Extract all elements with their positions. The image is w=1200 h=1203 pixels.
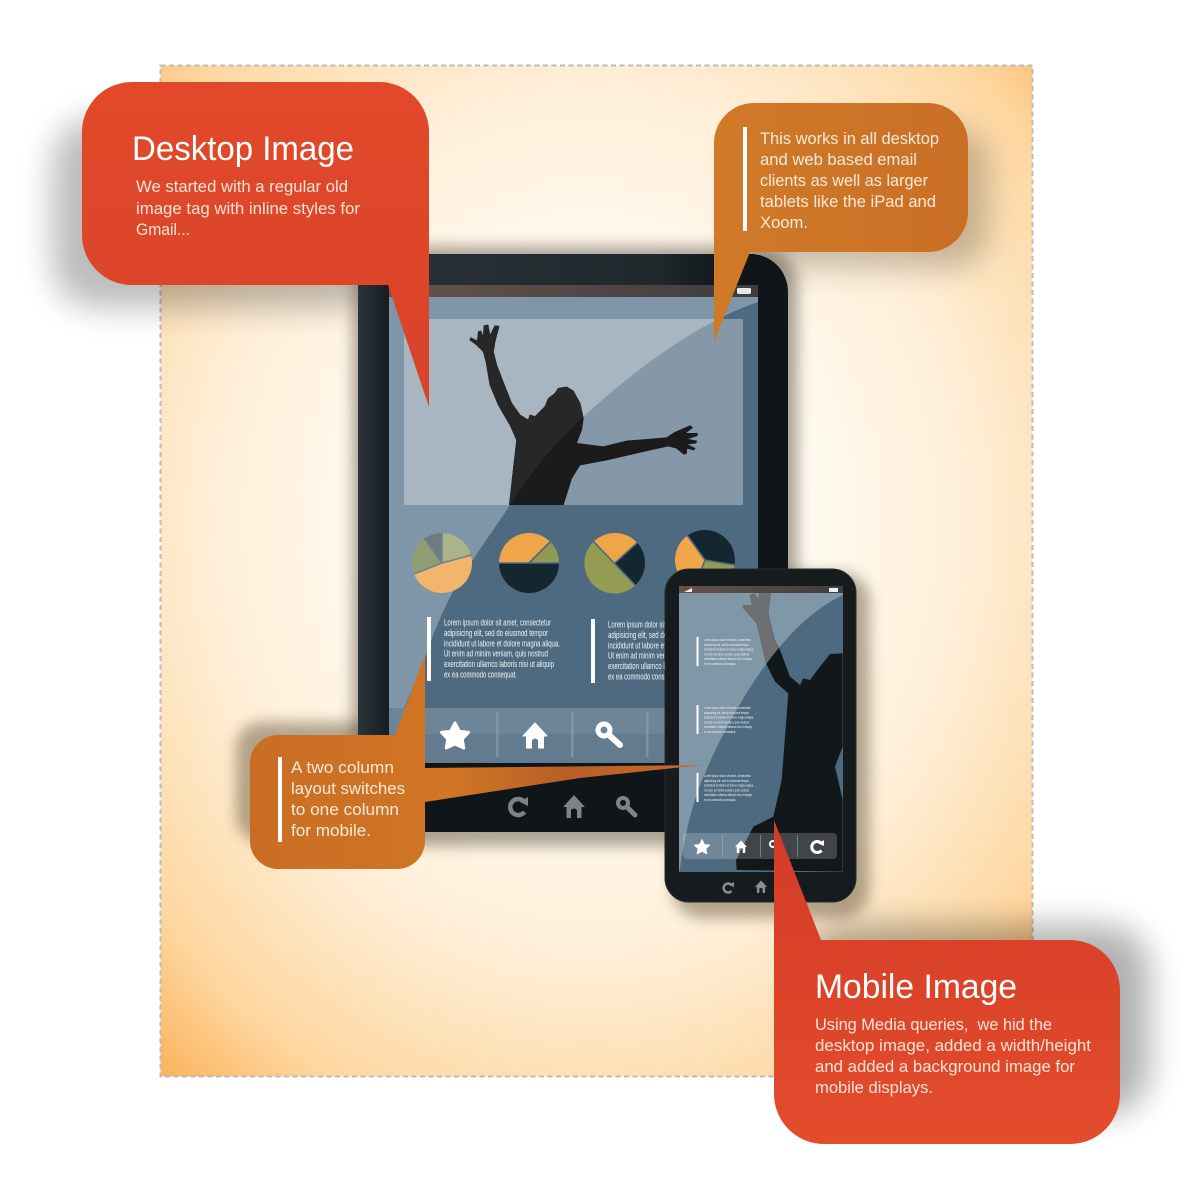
bubble bbox=[82, 82, 429, 407]
text column 1 bbox=[427, 617, 560, 681]
column text: Ut enim ad minim veniam, quis nostrud bbox=[444, 648, 548, 658]
column text: incididunt ut labore et dolore magna aliqua. bbox=[608, 640, 724, 650]
text bbox=[704, 638, 754, 666]
rule bbox=[278, 757, 282, 842]
pie chart 3 bbox=[584, 533, 645, 594]
body text: Using Media queries, we hid the bbox=[815, 1015, 1052, 1034]
icon: home bbox=[523, 723, 547, 748]
tablet top bezel bbox=[358, 254, 784, 292]
rule bbox=[743, 127, 747, 231]
body text: This works in all desktop bbox=[760, 129, 939, 148]
body text: and added a background image for bbox=[815, 1057, 1075, 1076]
icon: search bbox=[770, 841, 776, 847]
body text: for mobile. bbox=[291, 821, 371, 840]
tablet device bbox=[358, 254, 788, 832]
body text: A two column bbox=[291, 758, 394, 777]
shadows bbox=[52, 118, 1150, 1115]
column text: incididunt ut labore et dolore magna aliqua. bbox=[444, 638, 560, 648]
column text: ex ea commodo consequat. bbox=[444, 670, 517, 680]
column text bbox=[608, 621, 664, 680]
column text: Ut enim ad minim veniam, quis nostrud bbox=[608, 650, 712, 660]
body text: to one column bbox=[291, 800, 399, 819]
phone device bbox=[665, 569, 856, 902]
tablet toolbar bbox=[389, 708, 664, 763]
pie chart 2 bbox=[498, 533, 560, 593]
callout: two column layout bbox=[250, 655, 703, 869]
silhouette lighter side bbox=[470, 325, 583, 505]
icon: refresh bbox=[724, 882, 734, 892]
bubble bbox=[714, 103, 968, 342]
body text bbox=[291, 758, 405, 840]
body text: Xoom. bbox=[760, 213, 808, 232]
tablet left bezel bbox=[358, 285, 389, 810]
signal icon bbox=[684, 588, 692, 592]
text: Lorem ipsum dolor sit amet, consectetur bbox=[704, 774, 752, 778]
text: Lorem ipsum dolor sit amet, consectetur bbox=[704, 706, 752, 710]
text bbox=[704, 706, 754, 734]
screen glare bbox=[679, 586, 843, 872]
text: Lorem ipsum dolor sit amet, consectetur bbox=[704, 638, 752, 642]
icon: home bbox=[735, 840, 747, 853]
icon: star bbox=[694, 840, 710, 854]
body text: clients as well as larger bbox=[760, 171, 928, 190]
text: exercitation ullamco laboris nisi ut aliquip bbox=[704, 725, 752, 729]
text: exercitation ullamco laboris nisi ut aliquip bbox=[704, 793, 752, 797]
body text: tablets like the iPad and bbox=[760, 192, 936, 211]
pie chart 4 bbox=[674, 530, 735, 572]
text: Ut enim ad minim veniam, quis nostrud bbox=[704, 720, 749, 724]
body text: and web based email bbox=[760, 150, 917, 169]
callout: mobile image bbox=[774, 820, 1120, 1144]
column text: adipisicing elit, sed do eiusmod tempor bbox=[608, 630, 712, 640]
body text bbox=[760, 129, 939, 232]
rule bbox=[696, 773, 698, 802]
heading: Mobile Image bbox=[815, 968, 1017, 1006]
hero image right tone bbox=[564, 319, 743, 505]
pie chart 1 bbox=[412, 532, 472, 593]
text: adipisicing elit, sed do eiusmod tempor bbox=[704, 711, 750, 715]
silhouette figure bbox=[470, 325, 697, 505]
text: incididunt ut labore et dolore magna aliqua. bbox=[704, 784, 754, 788]
column text bbox=[444, 618, 560, 680]
icon: home bbox=[755, 880, 767, 893]
column text: Lorem ipsum dolor sit amet, consectetur bbox=[444, 618, 551, 628]
phone screen bbox=[679, 586, 843, 872]
body text: image tag with inline styles for bbox=[136, 199, 360, 218]
rule bbox=[696, 705, 698, 734]
bubble bbox=[774, 820, 1120, 1144]
body text: mobile displays. bbox=[815, 1078, 933, 1097]
callout: email clients bbox=[714, 103, 968, 342]
text: incididunt ut labore et dolore magna aliqua. bbox=[704, 648, 754, 652]
column text: ex ea commodo consequat. bbox=[608, 672, 681, 682]
text: incididunt ut labore et dolore magna aliqua. bbox=[704, 716, 754, 720]
column rule bbox=[427, 617, 431, 681]
phone text block 1 bbox=[696, 637, 754, 666]
text: ex ea commodo consequat. bbox=[704, 662, 736, 666]
hero image bbox=[404, 319, 743, 505]
text: Ut enim ad minim veniam, quis nostrud bbox=[704, 788, 749, 792]
text: adipisicing elit, sed do eiusmod tempor bbox=[704, 779, 750, 783]
column text: exercitation ullamco laboris nisi ut aliquip bbox=[608, 661, 718, 671]
screen base bbox=[679, 586, 843, 872]
battery icon bbox=[829, 588, 838, 592]
heading: Desktop Image bbox=[132, 130, 354, 168]
rule bbox=[696, 637, 698, 666]
screen glare bbox=[389, 297, 758, 708]
status bar bbox=[389, 285, 758, 297]
body text: Gmail... bbox=[136, 220, 190, 239]
screen base bbox=[404, 302, 758, 708]
text: Ut enim ad minim veniam, quis nostrud bbox=[704, 652, 749, 656]
icon: search bbox=[598, 724, 620, 745]
body text bbox=[136, 177, 360, 239]
phone bottom icons bbox=[724, 880, 767, 893]
tablet bottom icons bbox=[510, 795, 635, 818]
phone toolbar bbox=[683, 833, 837, 859]
icon: refresh bbox=[812, 840, 824, 852]
text: adipisicing elit, sed do eiusmod tempor bbox=[704, 643, 750, 647]
silhouette dark bbox=[736, 587, 843, 872]
phone text block 2 bbox=[696, 705, 754, 734]
bubble with two tails bbox=[250, 655, 703, 869]
body text: We started with a regular old bbox=[136, 177, 348, 196]
column text: Lorem ipsum dolor sit amet, consectetur bbox=[608, 620, 715, 630]
phone text block 3 bbox=[696, 773, 754, 802]
phone body bbox=[665, 569, 856, 902]
tablet body bbox=[358, 254, 788, 832]
text: exercitation ullamco laboris nisi ut aliquip bbox=[704, 657, 752, 661]
text: ex ea commodo consequat. bbox=[704, 798, 736, 802]
body text: desktop image, added a width/height bbox=[815, 1036, 1091, 1055]
column text: exercitation ullamco laboris nisi ut aliquip bbox=[444, 659, 554, 669]
icon: star bbox=[442, 723, 468, 748]
column rule bbox=[591, 619, 595, 683]
hero image light tone bbox=[404, 319, 743, 505]
status bar bbox=[679, 586, 843, 593]
tablet screen bbox=[389, 285, 758, 763]
column text: adipisicing elit, sed do eiusmod tempor bbox=[444, 628, 548, 638]
icon: refresh bbox=[510, 797, 528, 815]
text bbox=[704, 774, 754, 802]
callout: desktop image bbox=[82, 82, 429, 407]
body text bbox=[815, 1015, 1091, 1097]
icon: home bbox=[563, 795, 585, 818]
silhouette ghost arm bbox=[742, 593, 779, 664]
text column 2 bbox=[591, 619, 664, 683]
icon: search bbox=[618, 798, 635, 815]
background panel bbox=[160, 66, 1032, 1076]
battery icon bbox=[737, 288, 751, 294]
text: ex ea commodo consequat. bbox=[704, 730, 736, 734]
body text: layout switches bbox=[291, 779, 405, 798]
